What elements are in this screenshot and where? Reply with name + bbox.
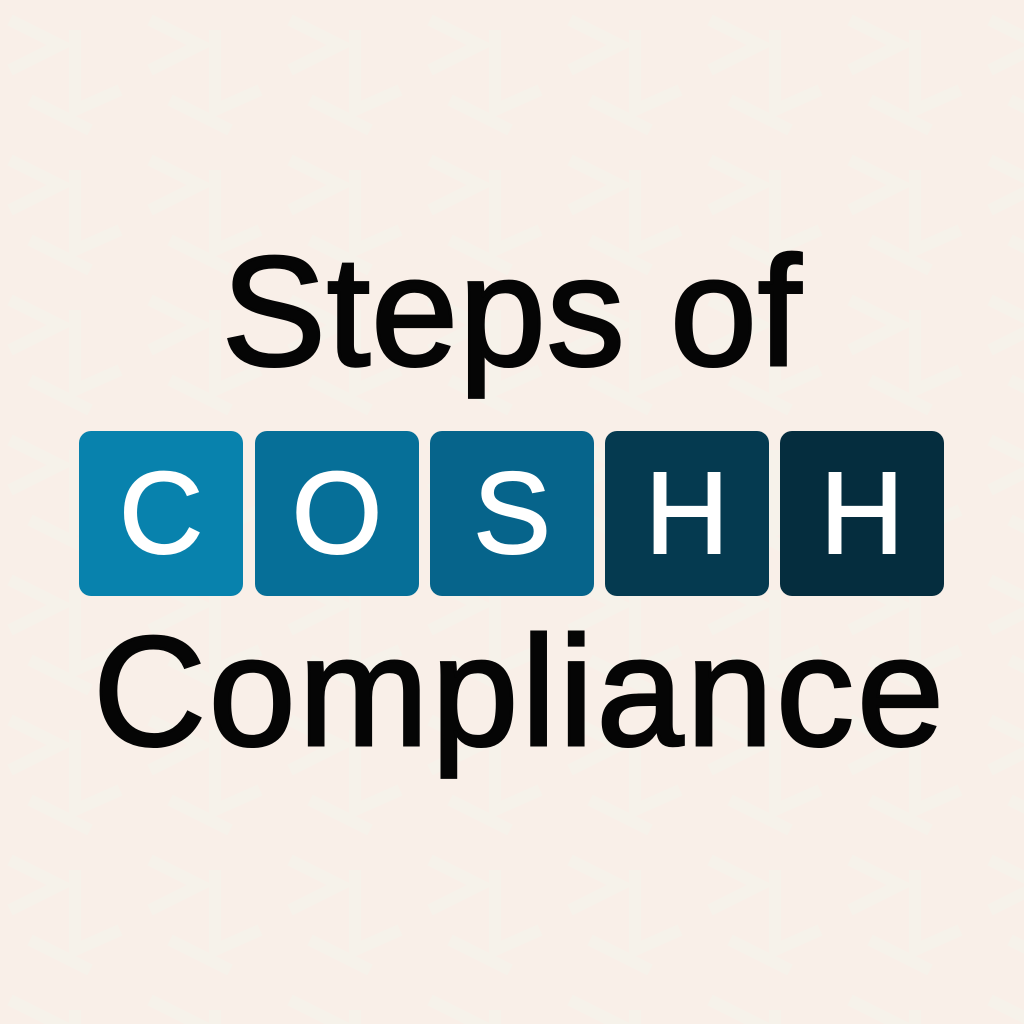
- tile O: [255, 431, 419, 596]
- tile H: H: [645, 448, 729, 578]
- tile C: C: [119, 448, 203, 578]
- title: Steps of: Steps of: [222, 225, 802, 399]
- tile H: [605, 431, 769, 596]
- tile H2: [780, 431, 944, 596]
- tile S: S: [473, 448, 551, 578]
- COSHH tiles: [79, 431, 944, 596]
- tile C: [79, 431, 243, 596]
- tile O: O: [292, 448, 382, 578]
- tile H2: H: [820, 448, 904, 578]
- tile S: [430, 431, 594, 596]
- title: Compliance: Compliance: [93, 605, 947, 779]
